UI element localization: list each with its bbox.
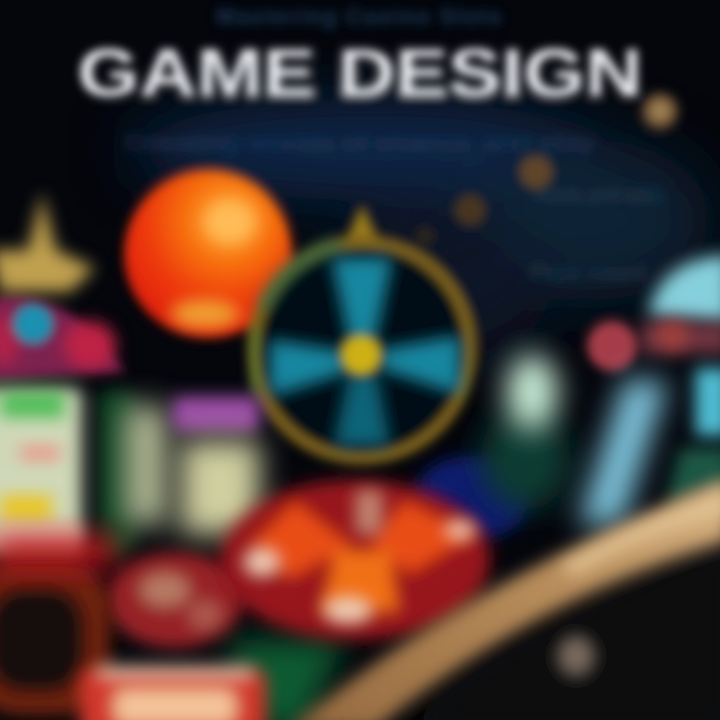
chips stack: [107, 552, 243, 648]
right slot panels: [578, 378, 668, 525]
side caption text: Reels and odds: [535, 182, 665, 207]
wheel top pin: [338, 205, 386, 258]
blue dome behind roulette: [414, 456, 530, 540]
slot dome blue light: [13, 304, 53, 344]
roulette white chips: [244, 490, 475, 623]
green shadow: [480, 410, 570, 510]
wheel ring: [254, 242, 470, 458]
ghost glow: [506, 354, 558, 430]
slot star topper: [0, 192, 95, 292]
side caption text: Player reward: [530, 260, 645, 285]
background nebula: [130, 100, 710, 360]
cyan dome: [648, 255, 720, 322]
side caption text: [530, 182, 665, 285]
decorative stars: [416, 93, 678, 245]
dark wood under band: [400, 540, 720, 720]
wheel cyan spokes: [270, 258, 460, 446]
right side slot and decorations: [480, 255, 720, 525]
left slot machine: [0, 192, 136, 555]
wheel dark disc: [256, 246, 468, 458]
tan curved band: [290, 478, 720, 720]
title: GAME DESIGN: [78, 35, 642, 111]
slot side column: [98, 390, 136, 555]
slot dome: [0, 296, 125, 380]
orange planet: [124, 170, 292, 338]
roulette orange segments: [250, 500, 475, 612]
second slot machine: [125, 396, 260, 535]
bottom left reel: [0, 535, 115, 715]
subtitle above title: Mastering Casino Slots: [216, 4, 504, 29]
table red disc: [220, 480, 490, 640]
slot body: [0, 388, 82, 553]
subtitle below title: Creating worlds of chance and play: [125, 130, 595, 155]
wheel yellow hub: [341, 335, 381, 375]
roulette table: [220, 480, 490, 640]
prize wheel: [251, 205, 470, 458]
red ball: [587, 321, 637, 371]
white blob in lower right: [558, 636, 594, 676]
bottom card box: [80, 666, 265, 720]
green felt: [225, 640, 345, 720]
